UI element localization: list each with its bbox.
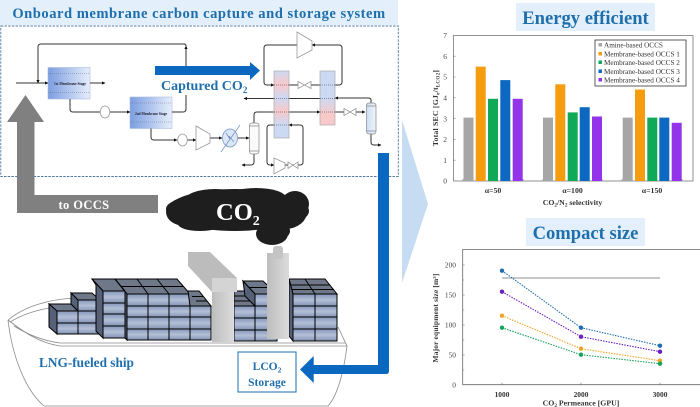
heading: energy efficient: Energy efficient [522, 8, 650, 29]
container block: stack before funnel [188, 291, 211, 340]
x axis labels: CO [543, 198, 554, 207]
container block: mid stack [234, 281, 277, 341]
label: LNG-fueled ship: LNG-fueled ship [39, 355, 134, 370]
y axis labels: 200 [445, 260, 456, 270]
heading: LNG ship hull [8, 298, 347, 406]
y axis labels: 7 [443, 31, 447, 40]
y axis labels [445, 260, 456, 389]
x axis labels: α=150 [642, 186, 662, 195]
smoke cloud: CO [216, 199, 253, 226]
legend: Membrane-based OCCS 4 [604, 76, 680, 84]
y axis title: LCO2 [436, 72, 442, 87]
container block: bow upper [71, 293, 100, 311]
process piping [16, 44, 381, 165]
y axis title: e [436, 92, 442, 95]
x axis labels: 2000 [574, 390, 589, 399]
bar chart: total SEC [431, 31, 693, 209]
x axis labels: α=100 [562, 186, 583, 195]
membrane stage 2: 2nd Membrane Stage [135, 111, 167, 116]
container block: stern stack [289, 279, 337, 341]
funnel: main [188, 252, 237, 342]
arrow: captured CO2: 2 [243, 85, 248, 95]
arrow: to OCCS: to OCCS [58, 198, 110, 212]
x axis labels: 2 [554, 202, 557, 208]
arrow: captured CO2: Captured CO [161, 79, 243, 94]
y axis labels: 0 [443, 177, 447, 186]
x axis labels: /N [556, 198, 565, 207]
separator vessels [250, 103, 376, 154]
membrane stage 2 [130, 97, 172, 128]
panel: process flow diagram [1, 26, 398, 176]
heat exchange columns [274, 71, 335, 138]
y axis labels: 2 [443, 135, 447, 144]
x axis labels: α=50 [485, 186, 501, 195]
y axis title: Total SEC [GJ [431, 95, 440, 146]
bars: alpha 50 [464, 67, 523, 181]
x axis labels: 3000 [653, 390, 668, 399]
arrow: captured CO2 [155, 62, 260, 95]
title banner [0, 0, 398, 25]
legend: Membrane-based OCCS 3 [604, 68, 680, 76]
arrow: liquid CO2 to storage [300, 153, 389, 383]
heading: compact size: Compact size [533, 223, 638, 244]
series: membrane blue [500, 268, 662, 348]
container block: main stack [115, 279, 190, 340]
bars: alpha 100 [543, 84, 602, 181]
y axis labels: 6 [443, 52, 447, 61]
legend: Membrane-based OCCS 2 [604, 59, 680, 67]
legend: Amine-based OCCS [604, 41, 663, 49]
series: membrane green [500, 326, 662, 366]
expansion valves [288, 82, 356, 168]
y axis labels: 5 [443, 73, 447, 82]
chevron connecting arrow [402, 120, 428, 283]
series: amine baseline [502, 277, 660, 279]
x axis labels: 1000 [495, 390, 510, 399]
containers [49, 279, 337, 341]
LCO2 storage box: Storage [248, 377, 286, 389]
y axis labels: 4 [443, 94, 447, 102]
x axis labels: 2 [565, 202, 568, 208]
y axis labels: 0 [452, 380, 456, 389]
LCO2 storage box: LCO [253, 361, 278, 373]
series: membrane orange [500, 314, 662, 363]
container block: bow lower [49, 304, 100, 334]
container block: second stack [92, 279, 125, 338]
compressors [100, 32, 312, 174]
y axis labels: 3 [443, 114, 447, 123]
funnel: smoke stack [267, 246, 289, 339]
y axis labels: 150 [445, 290, 456, 300]
heading: compact size [526, 218, 645, 246]
line chart: major equipment size [431, 250, 700, 407]
y axis labels: 100 [445, 320, 456, 329]
heat exchanger [221, 125, 240, 152]
LCO2 storage box: 2 [278, 366, 282, 374]
x axis labels [485, 186, 662, 208]
membrane stage 1: 1st Membrane Stage [54, 81, 86, 86]
y axis title: ] [431, 70, 440, 73]
y axis title: Major equipment size [m³] [431, 274, 440, 362]
y axis labels: 1 [443, 156, 447, 165]
legend [595, 40, 686, 86]
y axis labels [443, 31, 447, 186]
smoke cloud: 2 [253, 214, 260, 229]
bars: alpha 150 [623, 90, 682, 181]
legend: Membrane-based OCCS 1 [604, 50, 680, 58]
y axis title: /t [431, 87, 440, 93]
x axis labels [495, 390, 668, 407]
smoke cloud [166, 188, 309, 245]
arrow: to OCCS [7, 95, 158, 213]
y axis labels: 50 [449, 350, 456, 359]
heading: energy efficient [516, 3, 655, 31]
title banner: Onboard membrane carbon capture and storage system [12, 6, 386, 22]
membrane stage 1 [48, 68, 90, 99]
LCO2 storage box [238, 352, 296, 392]
series: membrane purple [500, 290, 662, 354]
x axis labels: selectivity [567, 198, 602, 207]
